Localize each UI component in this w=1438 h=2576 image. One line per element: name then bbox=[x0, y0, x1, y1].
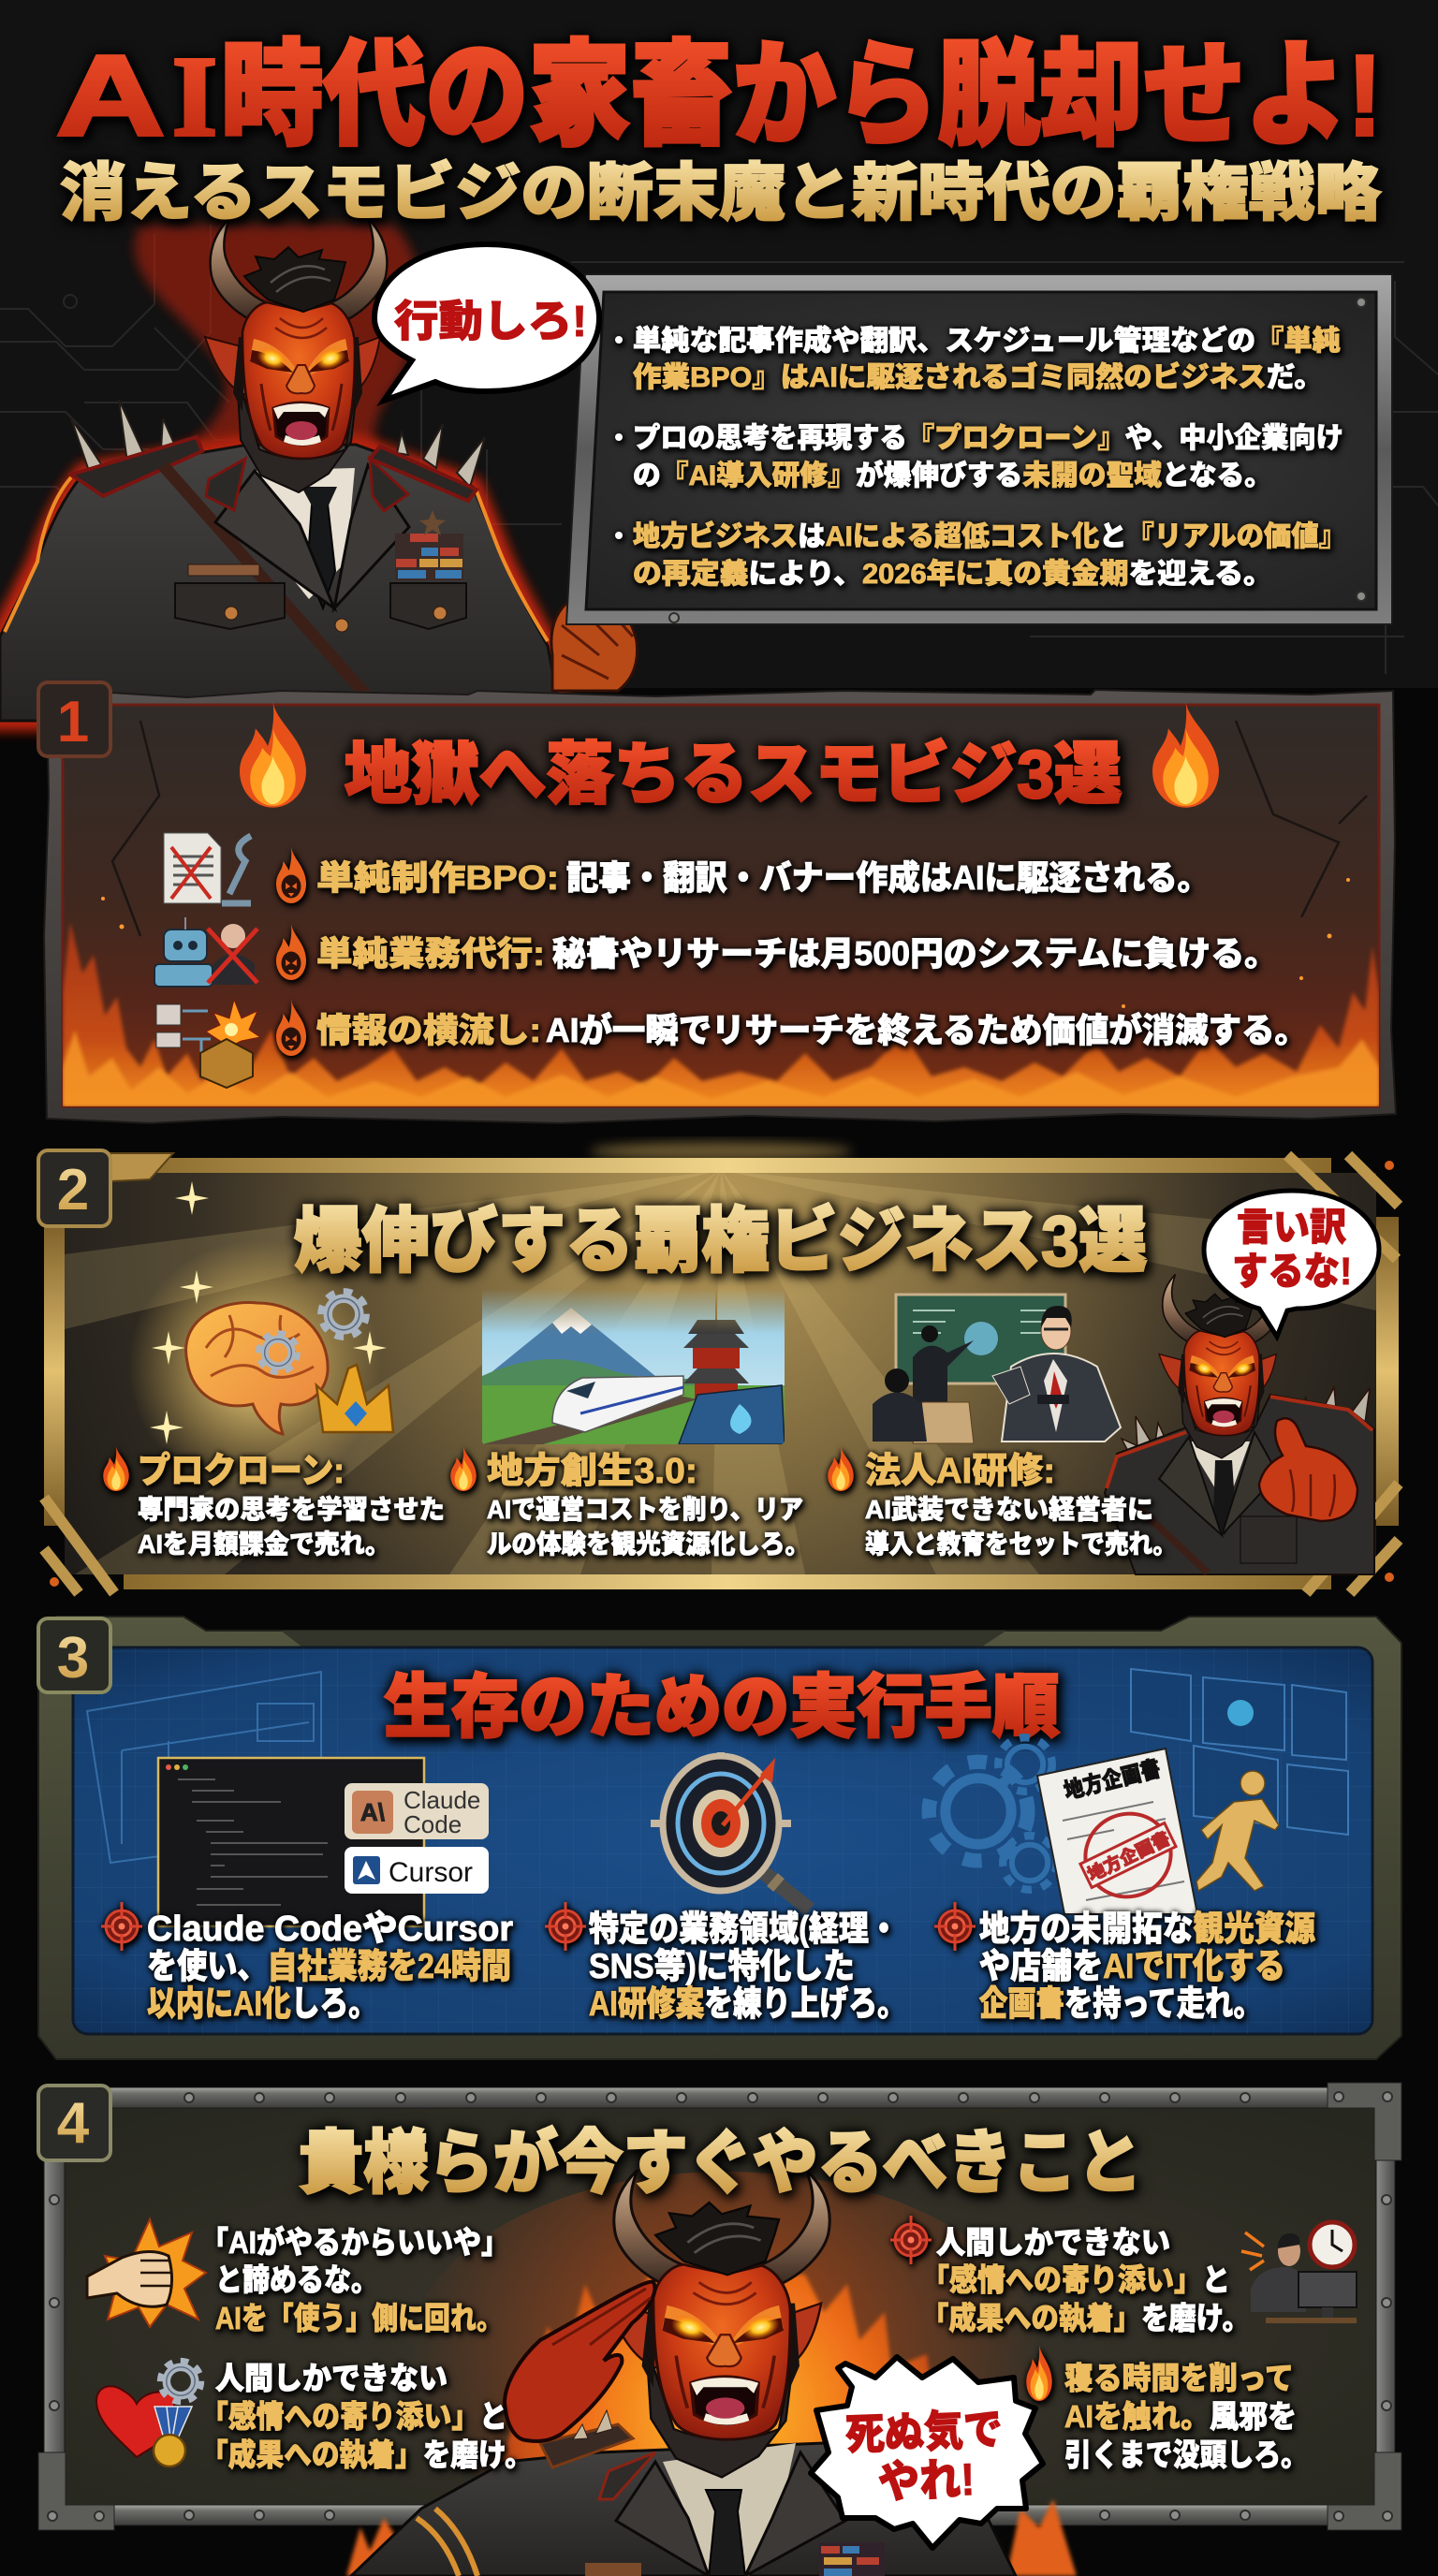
action 4: AIを触れ。風邪を bbox=[1064, 2399, 1297, 2434]
step 2 bbox=[545, 1902, 906, 2023]
illustration: regional plan document, gears and runner: 地方企画書 bbox=[1062, 1755, 1163, 1805]
step 2: SNS等)に特化した bbox=[589, 1947, 855, 1985]
illustration: Fuji, bullet train and pagoda bbox=[482, 1289, 785, 1444]
summary text: プロの思考を再現する『プロクローン』や、中小企業向け bbox=[633, 423, 1343, 454]
badge 1: 1 bbox=[57, 690, 89, 754]
olive frame bbox=[38, 1617, 1401, 2059]
blueprint sketch bbox=[87, 1672, 321, 1863]
heading: 爆伸びする覇権ビジネス3選 bbox=[294, 1202, 1147, 1281]
Cursor badge bbox=[345, 1847, 489, 1894]
item 3: 法人AI研修: 法人AI研修: bbox=[865, 1452, 1055, 1491]
summary text: の再定義により、2026年に真の黄金期 を迎える。 bbox=[633, 559, 1272, 590]
item 2: 地方創生3.0 bbox=[450, 1446, 810, 1559]
badge 2 bbox=[38, 1150, 110, 1226]
action 3: 人間しかできない bbox=[936, 2225, 1170, 2260]
speech bubble: 言い訳するな!: するな! bbox=[1232, 1250, 1352, 1293]
title: A bbox=[56, 32, 165, 159]
action 3: 「感情への寄り添い」と bbox=[921, 2262, 1230, 2297]
steel frame bbox=[38, 2083, 1401, 2530]
illustration: regional plan document, gears and runner: 地方企画書 bbox=[1084, 1827, 1173, 1886]
action 2: 「成果への執着」を磨け。 bbox=[200, 2437, 533, 2472]
badge 4: 4 bbox=[57, 2091, 90, 2156]
Claude Code badge bbox=[345, 1783, 489, 1839]
item 3: 法人AI研修: 導入と教育をセットで売れ。 bbox=[865, 1530, 1177, 1559]
icon: target with arrow and magnifier bbox=[651, 1752, 810, 1910]
row 3 text bbox=[276, 1000, 1308, 1056]
step 3 bbox=[934, 1902, 1315, 2023]
row 2 text bbox=[276, 924, 1278, 980]
action 1 bbox=[200, 2225, 509, 2335]
gold frame bbox=[44, 1158, 1399, 1589]
action 3 bbox=[890, 2216, 1250, 2335]
icon: wires and exploding crate bbox=[156, 1000, 260, 1088]
summary text: 地方ビジネスはAIによる超低コスト化と『リアルの価値』 bbox=[633, 520, 1346, 552]
summary text: の『AI導入研修』が爆伸びする未開の聖域となる。 bbox=[633, 460, 1272, 491]
section 1: hell panel bbox=[38, 682, 1396, 1123]
action 2: 人間しかできない bbox=[215, 2361, 448, 2395]
demon 2: pointing demon bbox=[1105, 1275, 1374, 1574]
item 1: プロクローン: プロクローン: bbox=[138, 1452, 345, 1491]
Claude Code badge: Code bbox=[404, 1810, 462, 1838]
item 2: 地方創生3.0: ルの体験を観光資源化しろ。 bbox=[487, 1530, 810, 1559]
action 1: 「AIがやるからいいや」 bbox=[200, 2225, 509, 2260]
badge 2: 2 bbox=[57, 1158, 89, 1222]
action 2 bbox=[200, 2361, 533, 2472]
action 4: 寝る時間を削って bbox=[1064, 2361, 1294, 2395]
dashboard sketch bbox=[1131, 1669, 1348, 1835]
row 3 text: AIが一瞬でリサーチを終えるため価値が消滅する。 bbox=[546, 1011, 1308, 1049]
illustration: brain with gears and crown bbox=[128, 1181, 393, 1493]
shout bubble: 死ぬ気でやれ! bbox=[811, 2357, 1043, 2548]
item 1: プロクローン: AIを月額課金で売れ。 bbox=[138, 1530, 390, 1559]
action 1: AIを「使う」側に回れ。 bbox=[215, 2301, 503, 2335]
Claude Code badge: Claude bbox=[404, 1786, 480, 1814]
step 3: 地方の未開拓な観光資源 bbox=[979, 1910, 1315, 1948]
icon: heart, gear and medal bbox=[96, 2361, 201, 2466]
demon 1: shouting commander with clenched fist bbox=[0, 218, 638, 721]
item 2: 地方創生3.0: AIで運営コストを削り、リア bbox=[487, 1495, 803, 1524]
icon: document and robot arm bbox=[164, 833, 251, 903]
item 3: 法人AI研修: AI武装できない経営者に bbox=[865, 1495, 1153, 1524]
step 3: 企画書を持って走れ。 bbox=[979, 1984, 1262, 2023]
step 3: や店舗をAIでIT化する bbox=[979, 1947, 1285, 1985]
icon: robot and crossed person bbox=[154, 917, 257, 987]
spikes bbox=[71, 400, 485, 487]
item 1: プロクローン: 専門家の思考を学習させた bbox=[138, 1495, 445, 1524]
medals bbox=[395, 534, 463, 580]
pointing hand bbox=[1259, 1418, 1357, 1521]
action 1: と諦めるな。 bbox=[215, 2262, 378, 2297]
summary text: 単純な記事作成や翻訳、スケジュール管理などの『単純 bbox=[633, 325, 1341, 357]
icon: fist with burst bbox=[87, 2219, 206, 2327]
item 1: プロクローン bbox=[103, 1446, 445, 1559]
section 4: steel panel with saluting demon bbox=[38, 2083, 1401, 2576]
item 3: 法人AI研修 bbox=[828, 1446, 1177, 1559]
row 3 text: 情報の横流し: bbox=[316, 1011, 541, 1049]
saluting arm bbox=[505, 2282, 654, 2441]
shout bubble: 死ぬ気でやれ!: 死ぬ気で bbox=[844, 2405, 1004, 2459]
illustration: code editor and tool badges bbox=[158, 1758, 489, 1926]
action 4: 引くまで没頭しろ。 bbox=[1064, 2437, 1308, 2472]
badge 4 bbox=[38, 2086, 110, 2160]
row 1 text bbox=[276, 847, 1210, 903]
fist bbox=[551, 593, 638, 691]
item 2: 地方創生3.0: 地方創生3.0: bbox=[487, 1452, 697, 1491]
row 1 text: 単純制作BPO: bbox=[316, 858, 559, 897]
step 1 bbox=[101, 1902, 513, 2023]
summary text bbox=[615, 325, 1346, 590]
heading: 地獄へ落ちるスモビジ3選 bbox=[345, 738, 1122, 812]
title: I bbox=[172, 34, 217, 160]
icon: person at computer with clock bbox=[1241, 2222, 1357, 2323]
summary text: 作業BPO』はAIに駆逐されるゴミ同然のビジネス だ。 bbox=[633, 361, 1323, 393]
speech bubble: 言い訳するな! bbox=[1204, 1191, 1379, 1337]
step 2: 特定の業務領域(経理・ bbox=[589, 1910, 899, 1948]
action 4 bbox=[1026, 2345, 1308, 2472]
illustration: corporate AI class bbox=[873, 1295, 1121, 1443]
row 1 text: 記事・翻訳・バナー作成はAIに駆逐される。 bbox=[566, 858, 1210, 897]
subtitle: 消えるスモビジの断末魔と新時代の覇権戦略 bbox=[60, 158, 1381, 228]
head bbox=[205, 218, 387, 492]
action 2: 「感情への寄り添い」と bbox=[200, 2399, 507, 2434]
step 1: 以内にAI化しろ。 bbox=[147, 1984, 377, 2023]
step 1: Claude CodeやCursor bbox=[147, 1910, 513, 1949]
section 2: gold panel bbox=[38, 1142, 1399, 1593]
heading: 貴様らが今すぐやるべきこと bbox=[299, 2124, 1142, 2202]
step 2: AI研修案を練り上げろ。 bbox=[589, 1984, 906, 2023]
badge 3: 3 bbox=[57, 1626, 89, 1690]
flame left bbox=[240, 702, 306, 808]
Cursor badge: Cursor bbox=[389, 1857, 473, 1888]
action 3: 「成果への執着」を磨け。 bbox=[921, 2301, 1250, 2335]
demon 3: saluting demon bbox=[351, 2170, 1016, 2576]
flame right bbox=[1152, 702, 1219, 808]
heading: 生存のための実行手順 bbox=[384, 1668, 1060, 1746]
illustration: regional plan document, gears and runner bbox=[929, 1737, 1279, 1914]
Claude Code badge: A\ bbox=[360, 1798, 385, 1826]
panel: summary metal plate bbox=[566, 274, 1392, 624]
speech bubble: 言い訳するな!: 言い訳 bbox=[1237, 1206, 1346, 1249]
stone frame bbox=[44, 690, 1396, 1123]
shout bubble: 死ぬ気でやれ!: やれ! bbox=[877, 2455, 976, 2509]
background fire bbox=[346, 2172, 1077, 2576]
row 2 text: 秘書やリサーチは月500円のシステムに負ける。 bbox=[552, 934, 1278, 973]
step 1: を使い、自社業務を24時間 bbox=[147, 1947, 511, 1985]
section 3: blueprint panel bbox=[38, 1617, 1401, 2059]
badge 1 bbox=[38, 682, 110, 756]
badge 3 bbox=[38, 1618, 110, 1692]
row 2 text: 単純業務代行: bbox=[316, 934, 545, 973]
speech bubble: 行動しろ! bbox=[374, 244, 599, 401]
speech bubble: 行動しろ!: 行動しろ! bbox=[394, 297, 587, 345]
